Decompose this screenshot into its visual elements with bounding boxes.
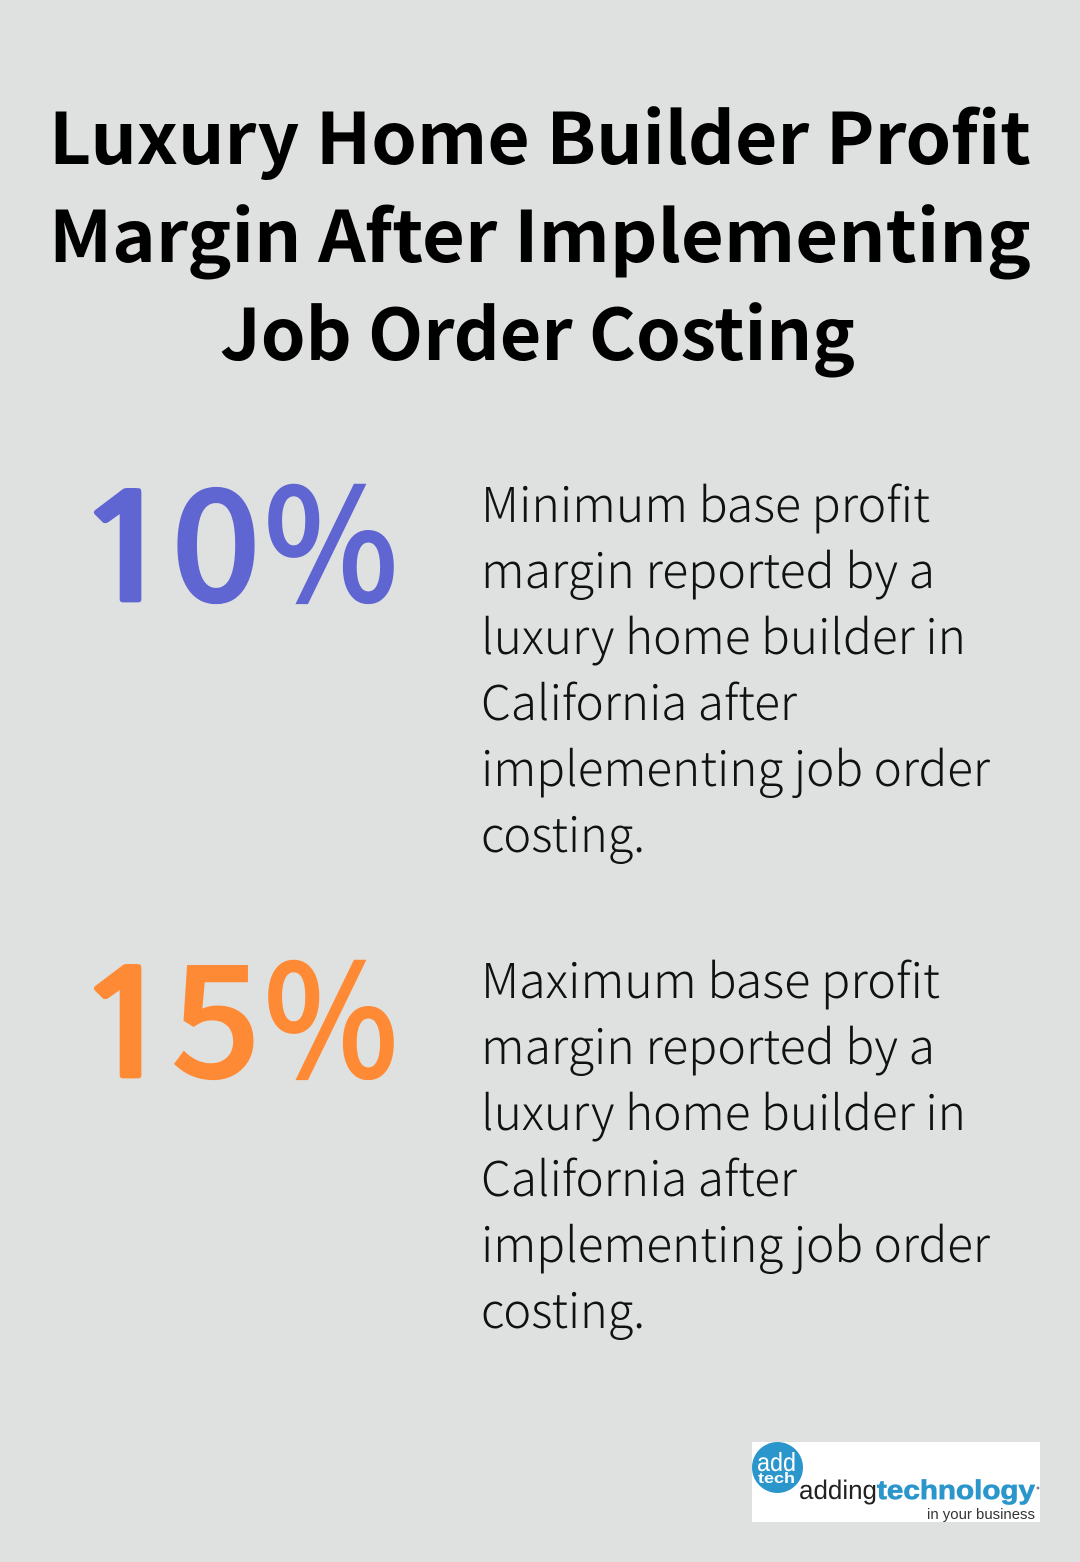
- text block: minimum base profit margin: costing.: [481, 796, 645, 866]
- title: Luxury Home Builder Profit: [49, 83, 1031, 185]
- text block: minimum base profit margin: [481, 466, 991, 866]
- statistic: 15%: 1: [72, 954, 181, 1100]
- logo: adding technology: technology: [877, 1475, 1035, 1505]
- text block: maximum base profit margin: [481, 942, 991, 1342]
- logo: adding technology: tech: [758, 1470, 795, 1487]
- title: [49, 83, 1031, 381]
- statistic: 10%: 1: [72, 478, 181, 624]
- statistic: 15%: [72, 897, 398, 1122]
- text block: minimum base profit margin: margin reported by a: [481, 532, 935, 602]
- statistic: 10%: 0: [171, 421, 261, 646]
- statistic: 15%: %: [264, 897, 398, 1122]
- text block: maximum base profit margin: margin reported by a: [481, 1008, 935, 1078]
- text block: maximum base profit margin: costing.: [481, 1272, 645, 1342]
- logo: adding technology: adding: [799, 1475, 877, 1505]
- text block: maximum base profit margin: California after: [481, 1140, 798, 1210]
- text block: maximum base profit margin: luxury home builder in: [481, 1074, 966, 1144]
- text block: minimum base profit margin: luxury home builder in: [481, 598, 966, 668]
- logo: adding technology: [752, 1442, 1040, 1523]
- statistic: 10%: [72, 421, 398, 646]
- logo: adding technology: in your business: [927, 1507, 1035, 1523]
- text block: minimum base profit margin: implementing job order: [481, 730, 991, 800]
- text block: maximum base profit margin: Maximum base profit: [481, 942, 940, 1012]
- logo: adding technology: add: [757, 1447, 796, 1477]
- statistic: 15%: 5: [171, 897, 261, 1122]
- title: Margin After Implementing: [49, 181, 1031, 283]
- text block: minimum base profit margin: Minimum base profit: [481, 466, 930, 536]
- text block: maximum base profit margin: implementing job order: [481, 1206, 991, 1276]
- statistic: 10%: %: [264, 421, 398, 646]
- text block: minimum base profit margin: California after: [481, 664, 798, 734]
- title: Job Order Costing: [220, 279, 855, 381]
